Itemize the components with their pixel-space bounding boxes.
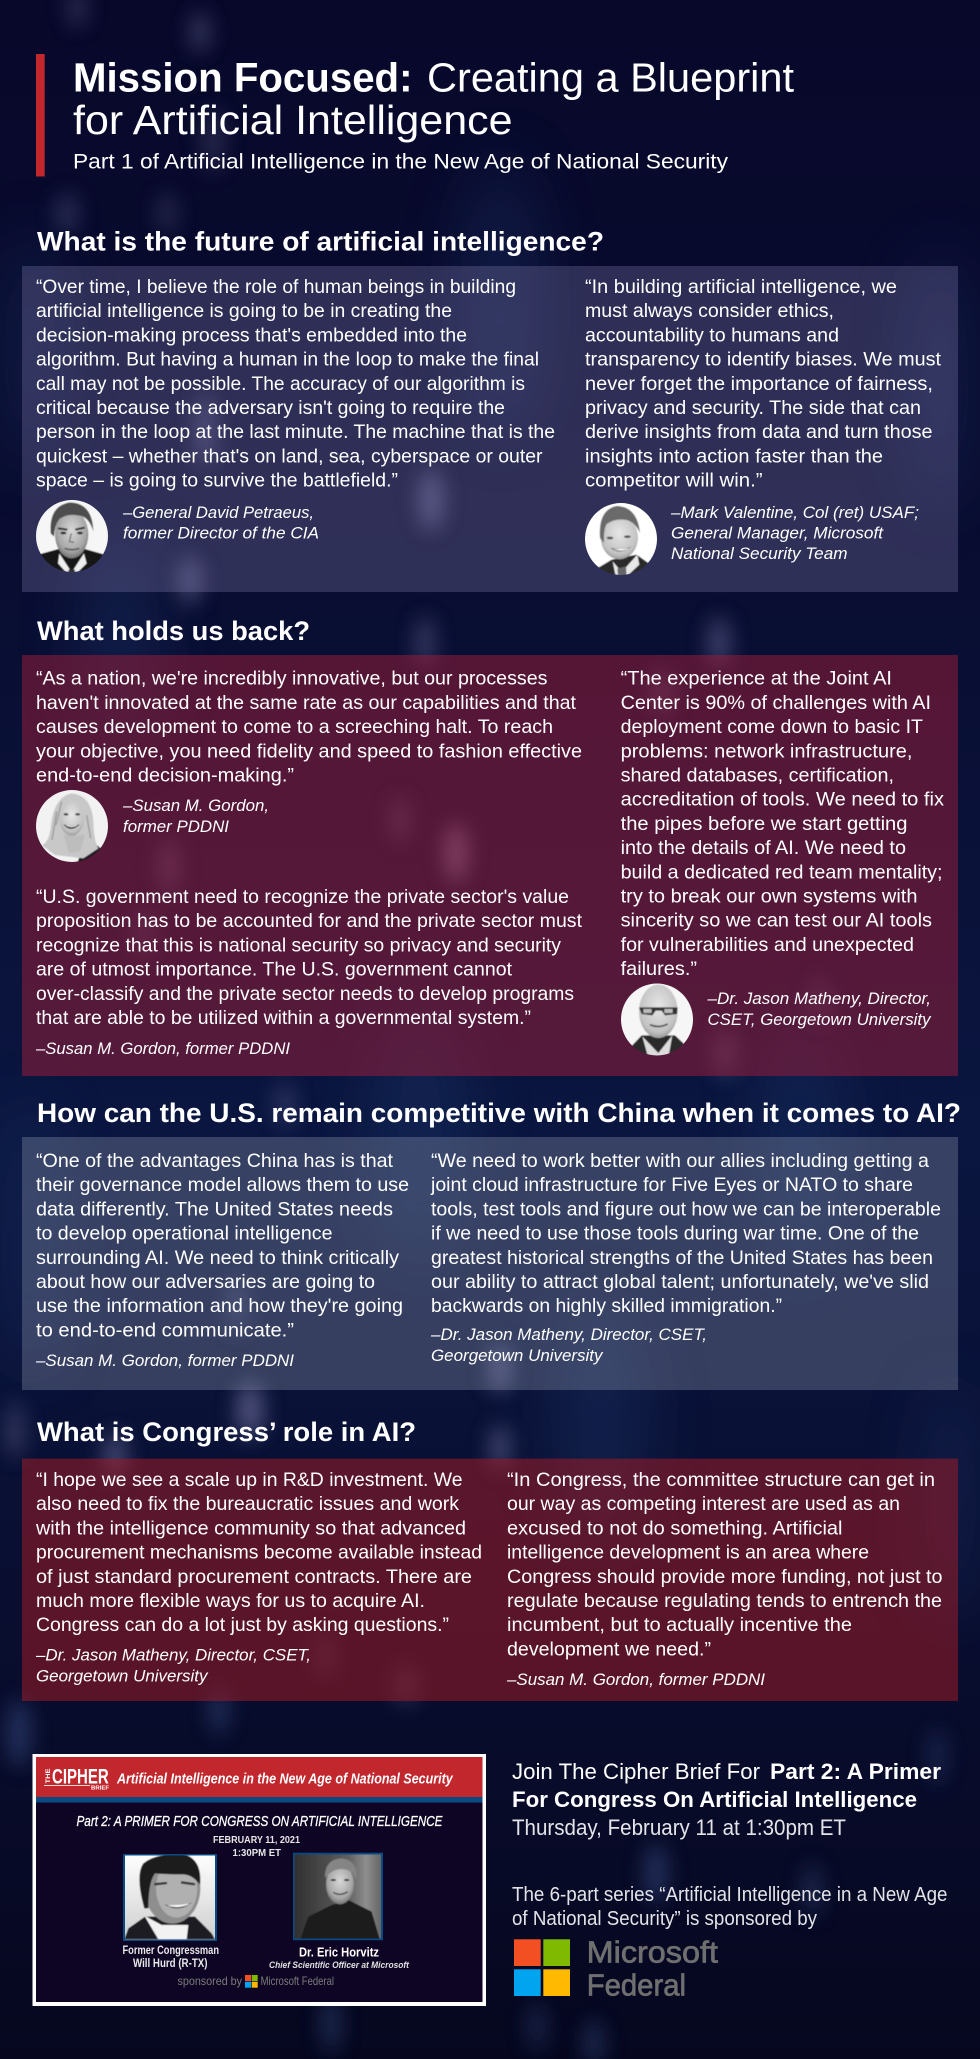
panel: what holds us back [22,655,958,1076]
portrait: Susan Gordon [36,790,108,862]
quote: Matheny on IT problems: try to break our own systems with [621,886,918,908]
headline: for Artificial Intelligence [73,97,512,143]
quote: Gordon on committees: “In Congress, the committee structure can get in [507,1469,935,1491]
quote: Matheny on IT problems: the pipes before we start getting [621,813,908,835]
quote: Gordon on governance: their governance model allows them to use [36,1174,409,1196]
heading: future of AI: What is the future of artificial intelligence? [37,226,604,256]
card header band: Artificial Intelligence in the New Age of National Security [116,1772,453,1788]
quote: Matheny on IT problems: problems: network infrastructure, [621,740,912,762]
card header band: CIPHER [52,1766,109,1789]
attribution: Mark Valentine: National Security Team [671,544,848,563]
card title and date: Part 2: A PRIMER FOR CONGRESS ON ARTIFICIAL INTELLIGENCE [76,1813,443,1830]
quote: Gordon on governance: about how our adversaries are going to [36,1271,375,1293]
speaker caption: Eric Horvitz [269,1945,410,1971]
logo: Microsoft Federal: Federal [587,1968,686,2003]
panel: Congress role [22,1459,958,1701]
quote: Gordon on governance: use the information and how they're going [36,1295,403,1317]
quote: Gordon on private sector: over-classify and the private sector needs to develop programs [36,983,574,1005]
card sponsor line [178,1974,334,1988]
quote: Matheny on R&D [35,1469,482,1686]
heading: what holds us back: What holds us back? [37,616,310,646]
quote: Matheny on IT problems: build a dedicated red team mentality; [621,861,942,883]
quote: Valentine: “In building artificial intelligence, we [585,276,897,298]
attribution: Mark Valentine: General Manager, Microsoft [671,524,884,542]
quote: Gordon on processes [36,668,582,786]
quote: Gordon on private sector [35,886,583,1058]
card title and date: FEBRUARY 11, 2021 [213,1834,300,1846]
quote: Petraeus: “Over time, I believe the role of human beings in building [36,276,516,298]
quote: Matheny on allies: tools, test tools and figure out how we can be interoperable [431,1198,941,1220]
attribution: David Petraeus: –General David Petraeus, [122,503,314,522]
quote: Matheny on allies: backwards on highly skilled immigration.” [431,1295,782,1317]
quote: Matheny on R&D: Congress can do a lot just by asking questions.” [36,1614,449,1636]
attribution: Jason Matheny [706,989,932,1029]
quote: Petraeus: decision-making process that's embedded into the [36,324,467,346]
card header band [36,1757,482,1802]
attribution: Jason Matheny: –Dr. Jason Matheny, Director, [706,989,931,1008]
quote: Valentine [585,276,942,492]
sponsor statement: of National Security” is sponsored by [512,1908,817,1930]
quote: Gordon on committees: development we need.” [507,1638,711,1660]
quote: Petraeus [36,276,555,492]
headline: Mission Focused: [73,54,412,100]
quote: Gordon on governance [35,1150,409,1370]
headline: Creating a Blueprint [427,54,795,100]
quote: Valentine: accountability to humans and [585,324,839,346]
headline [73,54,795,143]
quote: Gordon on committees: regulate because regulating tends to entrench the [507,1590,942,1612]
attribution: Susan Gordon: former PDDNI [123,817,229,836]
quote: Valentine: competitor will win.” [585,470,762,492]
call to action text [512,1759,941,1840]
quote: Matheny on R&D: –Dr. Jason Matheny, Director, CSET, [35,1646,311,1665]
quote: Matheny on R&D: “I hope we see a scale up in R&D investment. We [36,1469,462,1491]
quote: Gordon on governance: data differently. The United States needs [36,1198,393,1220]
quote: Gordon on governance: to develop operational intelligence [36,1223,332,1245]
quote: Matheny on IT problems: deployment come down to basic IT [621,716,923,738]
quote: Matheny on IT problems: accreditation of tools. We need to fix [621,789,944,811]
speaker caption: Will Hurd: Former Congressman [122,1945,219,1957]
quote: Matheny on IT problems: failures.” [621,958,697,980]
quote: Gordon on private sector: are of utmost importance. The U.S. government cannot [36,959,513,981]
card sponsor line: sponsored by [178,1974,242,1988]
speaker photo: Will Hurd [122,1853,217,1941]
panel: competing with China [22,1137,958,1390]
heading: competing with China: How can the U.S. remain competitive with China when it comes to AI? [37,1098,961,1128]
quote: Valentine: transparency to identify biases. We must [585,349,942,371]
card header band: THE [45,1768,52,1784]
quote: Matheny on R&D: much more flexible ways for us to acquire AI. [36,1590,425,1612]
event promo card: Part 2 [32,1754,486,2006]
attribution: Susan Gordon [122,796,269,836]
quote: Matheny on R&D: also need to fix the bureaucratic issues and work [36,1493,459,1515]
title block [36,54,795,176]
quote: Matheny on IT problems: shared databases, certification, [621,764,894,786]
quote: Petraeus: critical because the adversary isn't going to require the [36,397,505,419]
quote: Matheny on IT problems: “The experience at the Joint AI [621,668,892,690]
quote: Matheny on allies: greatest historical strengths of the United States has been [431,1247,933,1269]
quote: Gordon on processes: your objective, you need fidelity and speed to fashion effective [36,740,582,762]
heading: Congress role: What is Congress’ role in AI? [37,1417,416,1447]
portrait: Mark Valentine [585,503,657,575]
quote: Gordon on processes: end-to-end decision-making.” [36,764,294,786]
quote: Gordon on processes: haven't innovated at the same rate as our capabilities and that [36,692,577,714]
quote: Matheny on IT problems: Center is 90% of challenges with AI [621,692,931,714]
speaker caption: Will Hurd: Will Hurd (R-TX) [133,1958,208,1970]
quote: Gordon on committees: incumbent, but to actually incentive the [507,1614,852,1636]
subtitle: Part 1 of Artificial Intelligence in the New Age of National Security [73,150,728,174]
quote: Gordon on processes: “As a nation, we're incredibly innovative, but our processes [36,668,548,690]
sponsor statement: The 6-part series “Artificial Intelligence in a New Age [512,1884,948,1906]
quote: Valentine: privacy and security. The side that can [585,397,921,419]
quote: Matheny on R&D: procurement mechanisms become available instead [36,1542,482,1564]
quote: Valentine: derive insights from data and turn those [585,421,932,443]
quote: Gordon on private sector: “U.S. government need to recognize the private sector's value [36,886,569,908]
logo: Microsoft Federal: Microsoft [587,1934,718,1969]
speaker caption: Eric Horvitz: Dr. Eric Horvitz [299,1945,379,1960]
quote: Matheny on R&D: with the intelligence community so that advanced [35,1517,466,1539]
call to action text: For Congress On Artificial Intelligence [512,1787,917,1812]
quote: Gordon on private sector: –Susan M. Gordon, former PDDNI [35,1039,290,1058]
card title and date [76,1813,443,1859]
icon: Microsoft four squares [514,1939,570,1996]
quote: Petraeus: algorithm. But having a human in the loop to make the final [36,349,539,371]
quote: Matheny on IT problems: sincerity so we can test our AI tools [621,910,932,932]
quote: Gordon on private sector: recognize that this is national security so privacy and security [36,934,561,956]
quote: Gordon on governance: surrounding AI. We need to think critically [36,1247,399,1269]
attribution: Mark Valentine [670,503,919,563]
quote: Matheny on IT problems: into the details of AI. We need to [621,837,906,859]
quote: Petraeus: artificial intelligence is going to be in creating the [36,300,452,322]
quote: Matheny on allies: our ability to attract global talent; unfortunately, we've slid [431,1271,929,1293]
quote: Petraeus: call may not be possible. The accuracy of our algorithm is [36,373,525,395]
call to action text: Join The Cipher Brief For [512,1759,760,1784]
portrait: David Petraeus [36,500,108,572]
quote: Matheny on allies: if we need to use those tools during war time. One of the [431,1223,919,1245]
card title and date: 1:30PM ET [232,1847,282,1859]
card sponsor line: Microsoft Federal [261,1974,334,1988]
quote: Petraeus: space – is going to survive the battlefield.” [36,470,398,492]
panel: future of AI [22,266,958,592]
quote: Petraeus: quickest – whether that's on land, sea, cyberspace or outer [36,445,543,467]
call to action text: Thursday, February 11 at 1:30pm ET [512,1815,846,1840]
attribution: David Petraeus: former Director of the CIA [123,524,319,542]
speaker caption: Eric Horvitz: Chief Scientific Officer at Microsoft [269,1960,410,1971]
quote: Gordon on committees: intelligence development is an area where [507,1542,869,1564]
quote: Gordon on governance: “One of the advantages China has is that [36,1150,394,1172]
sponsor statement [512,1884,948,1930]
attribution: Jason Matheny: CSET, Georgetown University [708,1010,932,1029]
portrait: Jason Matheny [621,984,693,1056]
speaker caption: Will Hurd [122,1945,219,1970]
quote: Matheny on IT problems: for vulnerabilities and unexpected [621,934,914,956]
quote: Petraeus: person in the loop at the last minute. The machine that is the [36,421,555,443]
quote: Valentine: must always consider ethics, [585,300,834,322]
logo: Microsoft Federal [514,1934,718,2003]
quote: Gordon on processes: causes development to come to a screeching halt. To reach [36,716,553,738]
attribution: David Petraeus [122,503,319,542]
quote: Matheny on allies: Georgetown University [431,1346,604,1365]
speaker photo: Eric Horvitz [292,1852,385,1942]
quote: Gordon on private sector: that are able to be utilized within a governmental system.” [36,1007,531,1029]
quote: Gordon on committees: Congress should provide more funding, not just to [507,1566,943,1588]
quote: Gordon on governance: –Susan M. Gordon, former PDDNI [35,1351,294,1370]
quote: Matheny on R&D: of just standard procurement contracts. There are [36,1566,472,1588]
quote: Matheny on allies: joint cloud infrastructure for Five Eyes or NATO to share [430,1174,913,1196]
call to action text: Part 2: A Primer [770,1759,941,1784]
quote: Gordon on committees: –Susan M. Gordon, former PDDNI [506,1670,765,1689]
quote: Gordon on committees: excused to not do something. Artificial [507,1517,842,1539]
quote: Valentine: never forget the importance of fairness, [585,373,933,395]
quote: Matheny on allies: –Dr. Jason Matheny, Director, CSET, [430,1325,707,1344]
attribution: Mark Valentine: –Mark Valentine, Col (ret) USAF; [670,503,919,522]
quote: Matheny on R&D: Georgetown University [36,1667,209,1686]
card header band: BRIEF [91,1786,110,1792]
quote: Gordon on governance: to end-to-end communicate.” [36,1319,294,1341]
quote: Matheny on allies: “We need to work better with our allies including getting a [431,1150,929,1172]
quote: Gordon on committees: our way as competing interest are used as an [507,1493,900,1515]
quote: Matheny on allies [430,1150,941,1365]
attribution: Susan Gordon: –Susan M. Gordon, [122,796,269,815]
quote: Matheny on IT problems [621,668,944,980]
quote: Gordon on committees [506,1469,943,1689]
red accent bar [36,54,45,176]
quote: Gordon on private sector: proposition has to be accounted for and the private sector must [36,910,583,932]
quote: Valentine: insights into action faster than the [585,445,883,467]
